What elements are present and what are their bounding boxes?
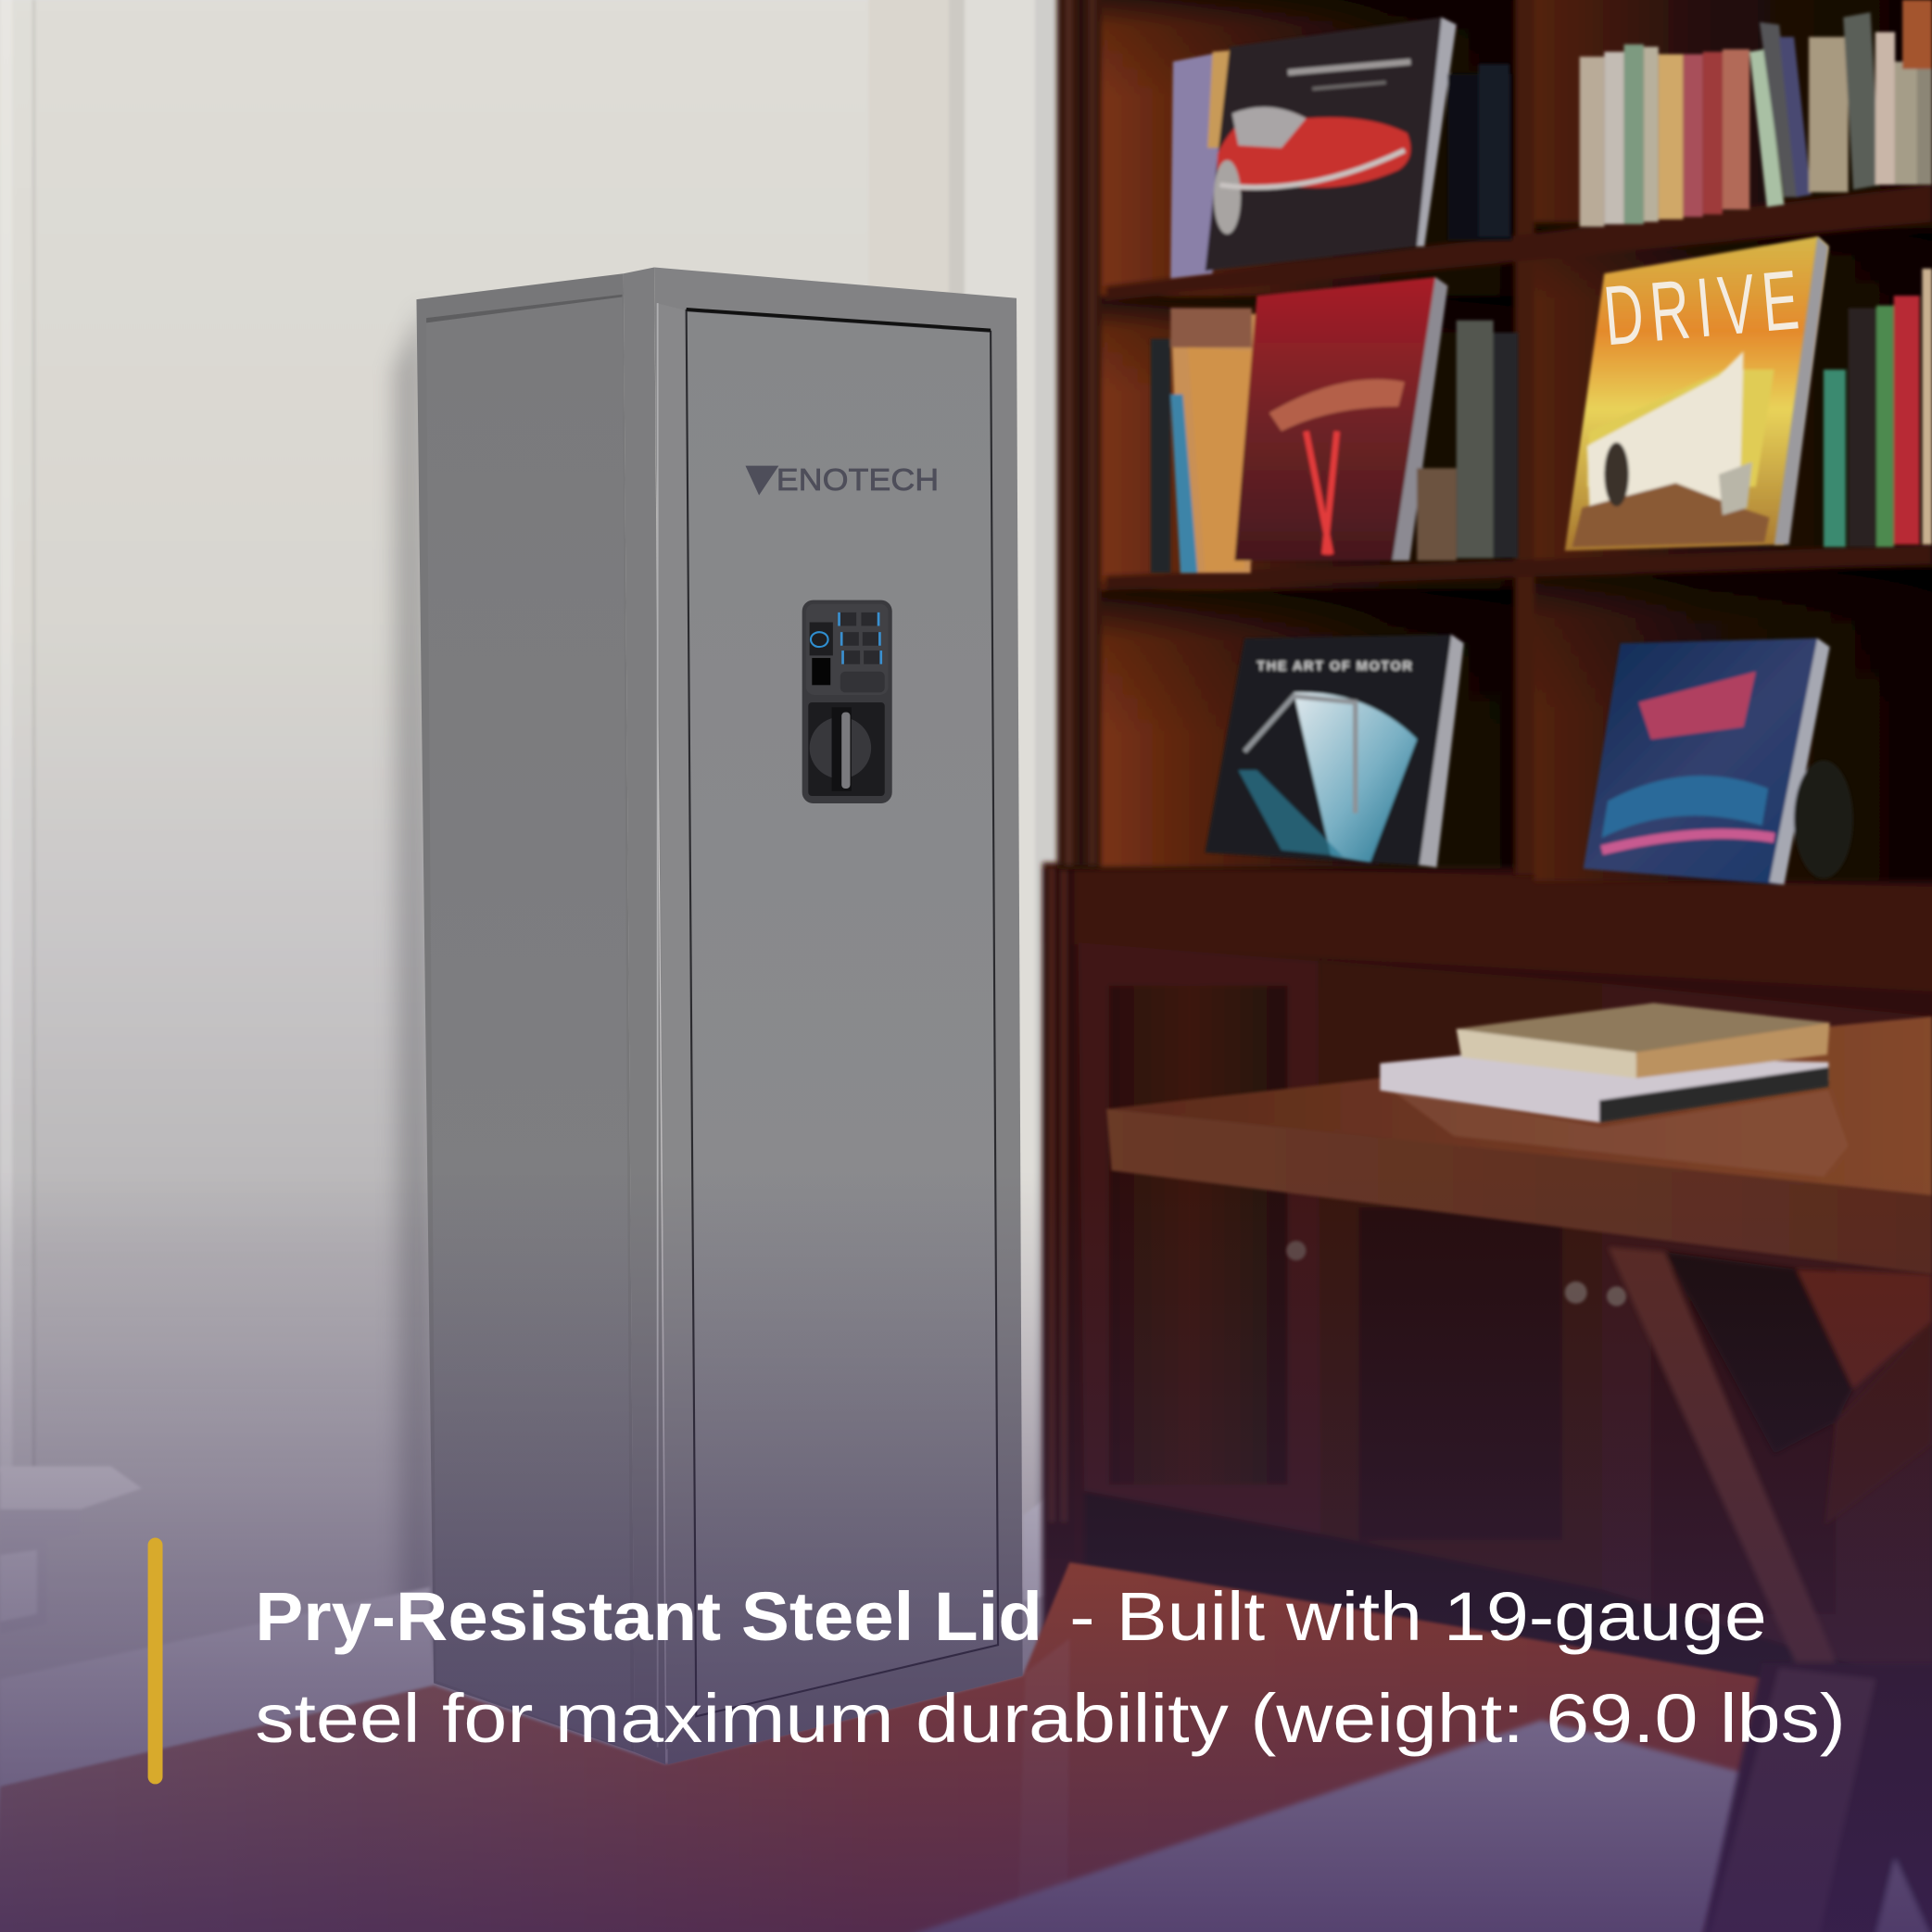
gun safe cabinet (416, 268, 1023, 1764)
vertical divider (1516, 0, 1534, 875)
books: top shelf (1170, 18, 1512, 279)
red car illustration (1214, 107, 1410, 234)
caption (255, 1578, 1846, 1757)
wood floor (0, 1562, 1762, 1932)
drive title: DRIVE (1600, 254, 1802, 363)
tabletop (1106, 1017, 1932, 1274)
car illustration (1572, 351, 1774, 547)
caption line one: - Built with 19-gauge (1069, 1578, 1767, 1655)
bookcase (1057, 0, 1932, 881)
safe front frame (654, 268, 1023, 1764)
books: middle left shelf (1151, 277, 1518, 573)
books: bottom shelf (1205, 635, 1853, 885)
books on table (1380, 1003, 1830, 1122)
cabinet knobs (1286, 1241, 1626, 1307)
purple gradient overlay (0, 1170, 1932, 1932)
left post (1057, 0, 1102, 865)
compartment backs (1100, 0, 1516, 296)
keypad (840, 612, 879, 664)
caption bold lead: Pry-Resistant Steel Lid (255, 1578, 1042, 1655)
safe side panel (416, 273, 635, 1752)
logo: ENOTECH (777, 463, 939, 498)
baseboard and wall plinth (0, 1466, 1069, 1787)
wall shadow beside safe (395, 303, 438, 1651)
drive book (1565, 236, 1828, 550)
books: bottom shelf: THE ART OF MOTOR (1256, 659, 1412, 674)
gold accent bar (148, 1537, 163, 1784)
safe corner strip (624, 268, 665, 1764)
wall background (0, 0, 1096, 1932)
dial (810, 717, 871, 778)
books: top right row (1580, 0, 1932, 227)
cabinet door panels (1079, 942, 1932, 1688)
rug (893, 1720, 1755, 1932)
safe door (687, 310, 998, 1716)
lower cabinet (1042, 863, 1932, 1749)
caption line two: steel for maximum durability (weight: 69.0 lbs) (255, 1680, 1846, 1757)
table legs (1608, 1247, 1932, 1932)
books: middle right row (1824, 269, 1932, 547)
shelves (1105, 184, 1932, 300)
electronic lock (802, 600, 892, 803)
